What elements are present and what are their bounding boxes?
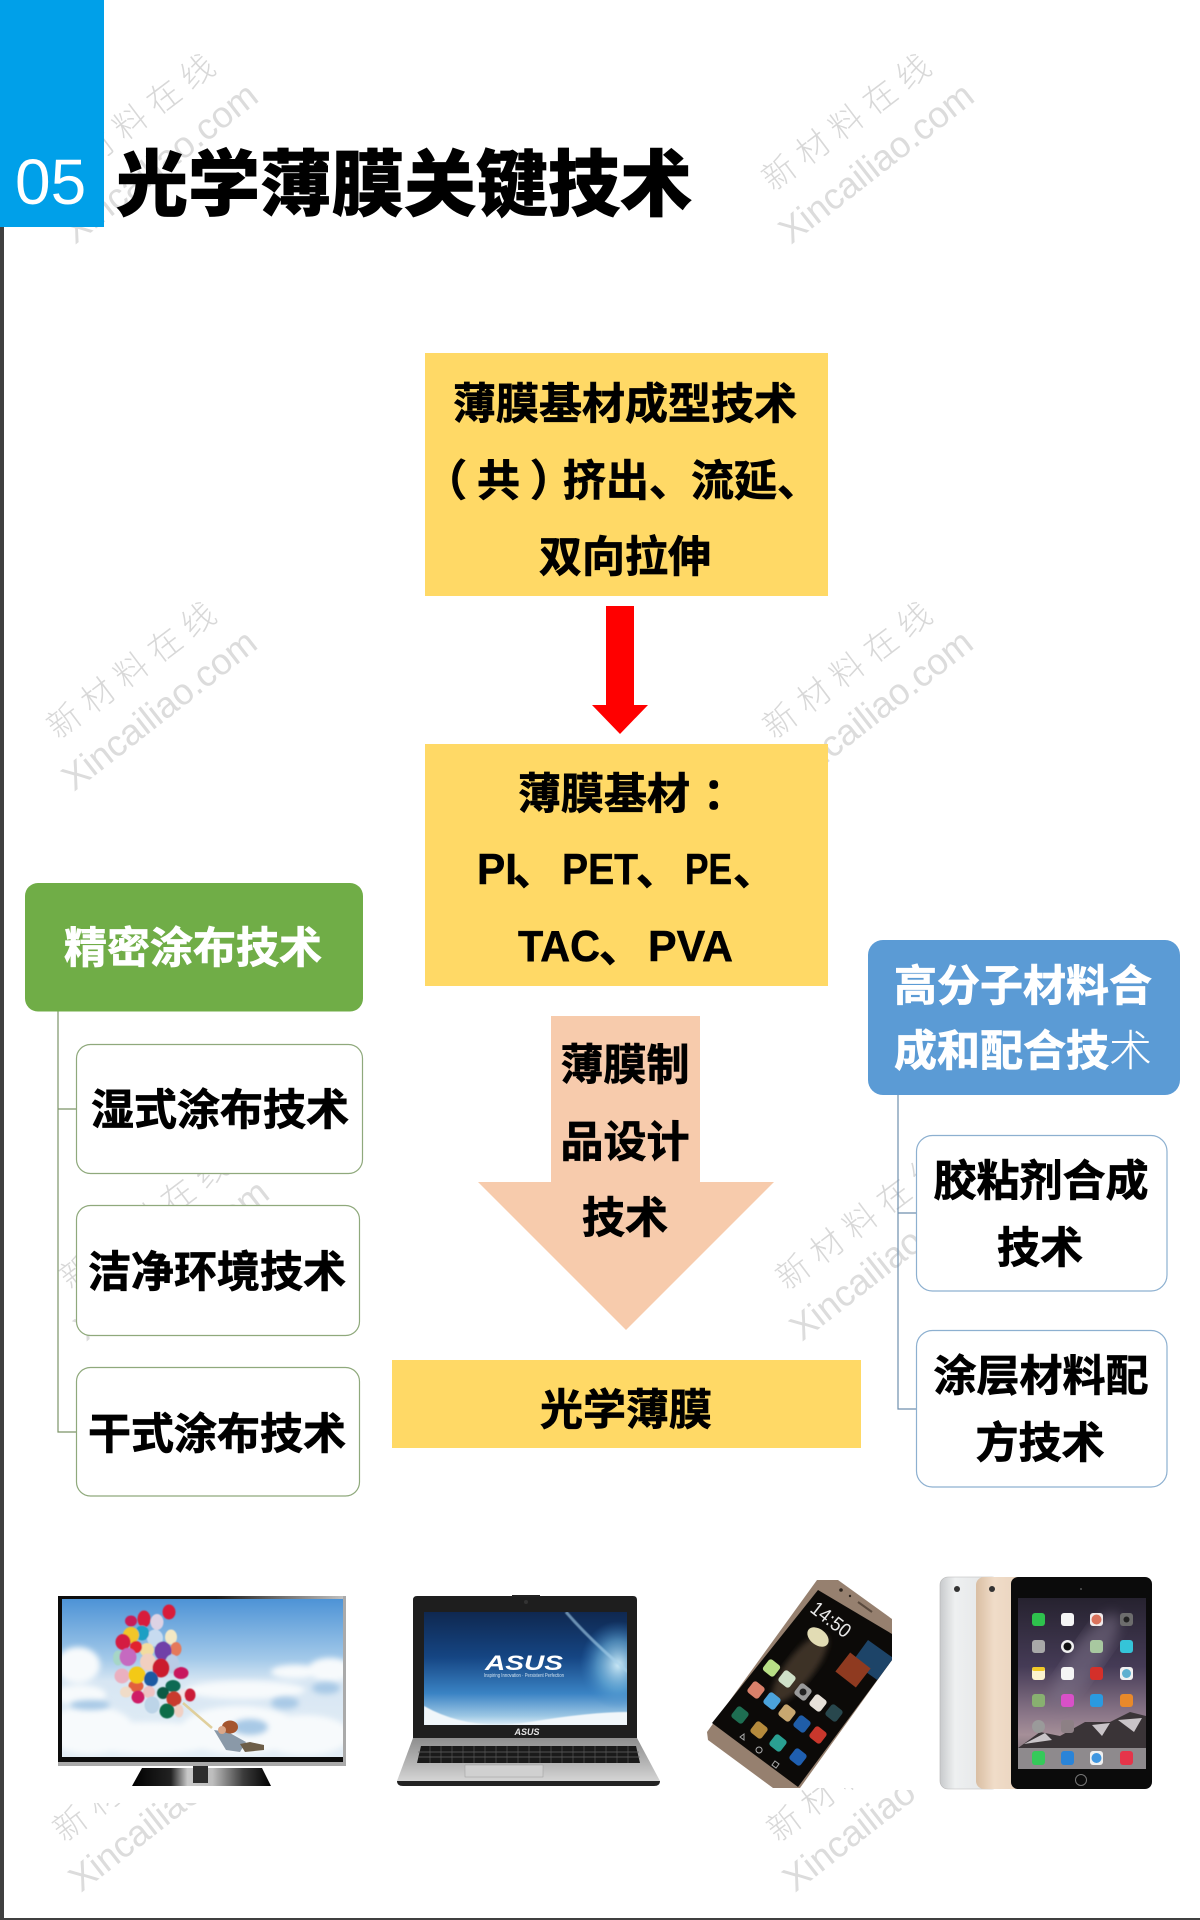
box: optical film: 光学薄膜	[540, 1376, 712, 1438]
watermarks: 新材料在线	[750, 35, 947, 200]
arrow: film product design technology: 技术	[582, 1184, 668, 1246]
item: coating formulation: 涂层材料配	[934, 1342, 1148, 1404]
box: film substrate forming technology: （	[424, 447, 467, 509]
item: adhesive synthesis: 胶粘剂合成	[934, 1147, 1148, 1209]
box: film substrate forming technology: 挤出、	[563, 447, 692, 509]
tv stand	[132, 1768, 271, 1786]
watermarks: 新材料在线	[41, 1686, 238, 1851]
laptop logo	[484, 1652, 564, 1679]
watermarks: Xincailiao.com	[66, 1171, 276, 1348]
item: adhesive synthesis	[916, 1136, 1167, 1291]
panel: precision coating technology	[25, 883, 363, 1496]
box: film substrates: PE	[685, 845, 732, 894]
heading: precision coating: 精密涂布技术	[64, 914, 322, 976]
box: film substrate forming technology: ）	[530, 447, 573, 509]
heading: polymer synthesis: 高分子材料合	[894, 952, 1152, 1014]
item: adhesive synthesis: 技术	[997, 1214, 1083, 1276]
arrow: film product design technology: 品设计	[560, 1108, 690, 1170]
arrow: film product design technology: 薄膜制	[560, 1031, 690, 1093]
arrow: film product design technology	[478, 1016, 774, 1330]
heading: polymer synthesis: 成和配合技术	[894, 1017, 1152, 1079]
item: wet coating: 湿式涂布技术	[91, 1076, 349, 1138]
watermarks: Xincailiao.com	[61, 1722, 271, 1899]
box: film substrates	[425, 744, 828, 986]
box: film substrates: PVA	[648, 922, 733, 971]
item: coating formulation	[916, 1330, 1167, 1487]
panel: polymer synthesis and formulation technology	[868, 940, 1180, 1487]
watermarks: Xincailiao.com	[55, 74, 265, 251]
box: film substrates: 、	[636, 836, 679, 898]
item: dry coating	[76, 1368, 360, 1496]
section number block	[0, 0, 104, 227]
item: clean environment: 洁净环境技术	[88, 1238, 346, 1300]
box: film substrate forming technology: 流延、	[691, 447, 820, 509]
image: laptop: ASUS	[513, 1727, 540, 1737]
connector: polymer tree	[898, 1095, 916, 1409]
watermarks: Xincailiao.com	[782, 1171, 992, 1348]
box: film substrates: ：	[703, 760, 746, 822]
watermarks: Xincailiao.com	[771, 74, 981, 251]
phone clock: 14:50	[806, 1598, 855, 1643]
arrow: red down	[592, 606, 648, 734]
item: clean environment	[76, 1206, 360, 1336]
box: film substrates: PI	[477, 845, 517, 894]
watermarks: 新材料在线	[35, 583, 232, 748]
box: film substrates: PET	[562, 845, 638, 894]
watermarks: 新材料在线	[764, 1134, 961, 1299]
box: film substrates: TAC	[518, 922, 600, 971]
watermarks: 新材料在线	[751, 583, 948, 748]
box: film substrate forming technology	[424, 353, 828, 596]
connector: coating tree	[58, 1011, 76, 1432]
section number block: 05	[15, 146, 86, 218]
watermarks: 新材料在线	[34, 35, 231, 200]
heading: polymer synthesis	[868, 940, 1180, 1095]
item: wet coating	[76, 1044, 362, 1174]
image: television	[58, 1596, 346, 1803]
box: film substrate forming technology: 共	[477, 447, 520, 509]
box: optical film	[392, 1360, 861, 1448]
watermarks: 新材料在线	[48, 1134, 245, 1299]
item: dry coating: 干式涂布技术	[88, 1400, 346, 1462]
watermarks: Xincailiao.com	[54, 621, 264, 798]
item: coating formulation: 方技术	[976, 1409, 1104, 1471]
watermarks: 新材料在线	[755, 1686, 952, 1851]
box: film substrate forming technology: 双向拉伸	[539, 523, 711, 585]
watermarks: Xincailiao.com	[775, 1722, 985, 1899]
watermarks: Xincailiao.com	[770, 621, 980, 798]
box: film substrates: 、	[513, 836, 556, 898]
heading: precision coating	[25, 883, 363, 1012]
box: film substrates: 、	[733, 836, 776, 898]
title: 光学薄膜关键技术	[116, 126, 692, 231]
image: tablets	[892, 1576, 1152, 1795]
laptop logo: Inspiring Innovation · Persistent Perfection	[484, 1673, 564, 1679]
image: smartphone	[700, 1578, 896, 1788]
watermarks	[34, 35, 992, 1899]
laptop logo: ASUS	[484, 1652, 563, 1675]
box: film substrate forming technology: 薄膜基材成型技术	[453, 370, 797, 432]
image: laptop	[395, 1590, 663, 1790]
box: film substrates: 薄膜基材	[518, 760, 690, 822]
box: film substrates: 、	[599, 913, 642, 975]
